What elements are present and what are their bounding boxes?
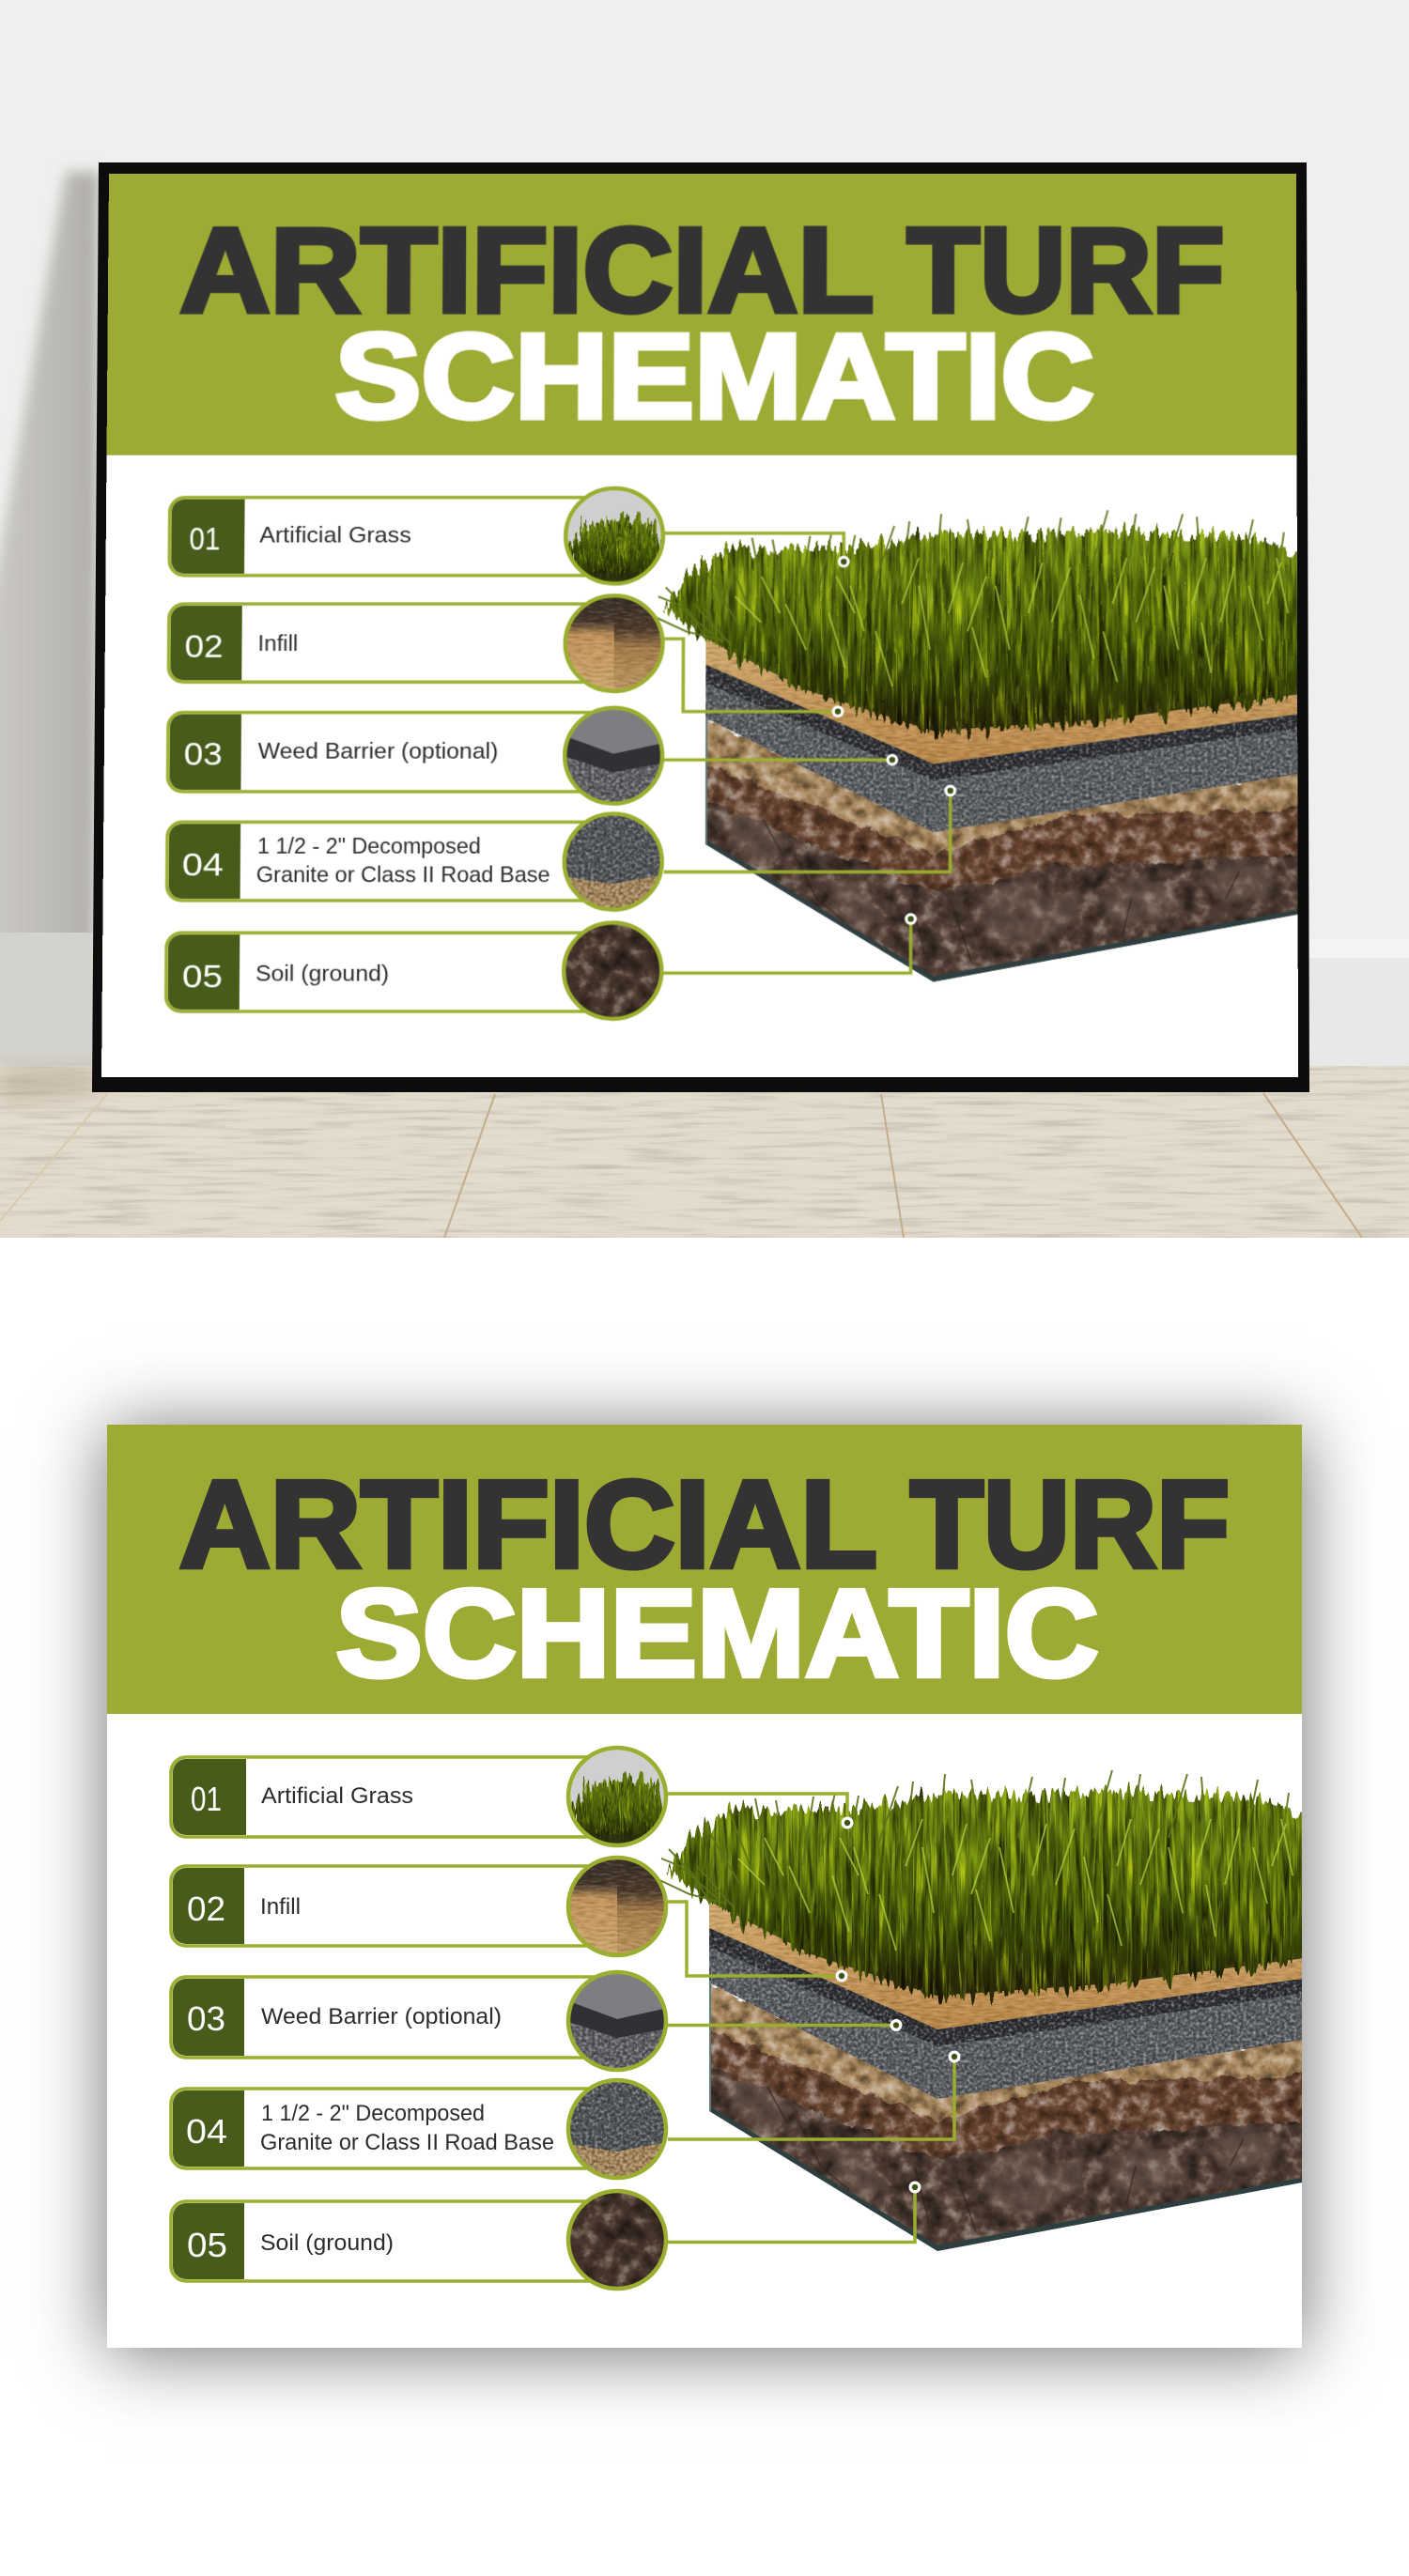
black poster frame bbox=[92, 162, 1309, 1092]
title: TURF bbox=[910, 1456, 1230, 1593]
row 05: soil bbox=[166, 921, 664, 1021]
row 05: soil: 05 bbox=[187, 2226, 227, 2264]
row 05: soil: 05 bbox=[180, 951, 222, 988]
title: SCHEMATIC bbox=[333, 310, 1093, 443]
row 01: artificial grass bbox=[169, 486, 665, 586]
title: TURF bbox=[906, 204, 1224, 338]
leader lines with dots bbox=[663, 533, 956, 973]
row 04: decomposed granite or road base: 1 1/2 - 2" Decomposed bbox=[261, 2101, 485, 2126]
mockup scene: wall, skirting and wooden floor bbox=[0, 0, 1409, 1238]
row 02: infill: Infill bbox=[256, 628, 297, 653]
row 05: soil bbox=[171, 2189, 668, 2291]
row 01: artificial grass: 01 bbox=[191, 1780, 222, 1818]
row 03: weed barrier bbox=[167, 706, 664, 806]
wall shadow left of the frame bbox=[0, 172, 99, 1064]
row 03: weed barrier: Weed Barrier (optional) bbox=[261, 2004, 502, 2029]
row 01: artificial grass: Artificial Grass bbox=[261, 1783, 413, 1809]
header band bbox=[107, 174, 1297, 455]
row 04: decomposed granite or road base bbox=[166, 812, 664, 912]
row 01: artificial grass: Artificial Grass bbox=[258, 521, 410, 546]
row 05: soil: Soil (ground) bbox=[254, 954, 386, 979]
poster: flat version with drop shadow bbox=[107, 1425, 1302, 2348]
row 01: artificial grass bbox=[171, 1746, 668, 1847]
row 02: infill: 02 bbox=[184, 625, 223, 662]
row 01: artificial grass: 01 bbox=[189, 519, 220, 555]
header band bbox=[107, 1425, 1302, 1714]
row 04: decomposed granite or road base: Granite or Class II Road Base bbox=[260, 2130, 554, 2155]
row 04: decomposed granite or road base: 1 1/2 - 2" Decomposed bbox=[255, 829, 478, 853]
row 04: decomposed granite or road base bbox=[171, 2078, 668, 2180]
turf cross-section illustration bbox=[654, 1770, 1319, 2260]
leader lines with dots bbox=[668, 1794, 960, 2243]
row 02: infill: Infill bbox=[260, 1894, 301, 1920]
title: ARTIFICIAL bbox=[179, 204, 875, 338]
row 05: soil: Soil (ground) bbox=[260, 2230, 394, 2256]
poster: framed mockup version bbox=[101, 174, 1298, 1077]
title bbox=[178, 204, 1225, 444]
row 03: weed barrier: 03 bbox=[183, 733, 222, 768]
wooden floor bbox=[0, 1066, 1409, 1238]
row 03: weed barrier bbox=[171, 1970, 668, 2072]
row 03: weed barrier: Weed Barrier (optional) bbox=[256, 735, 496, 759]
row 02: infill bbox=[168, 594, 665, 693]
row 03: weed barrier: 03 bbox=[187, 1999, 225, 2038]
row 04: decomposed granite or road base: 04 bbox=[186, 2112, 227, 2151]
title: ARTIFICIAL bbox=[179, 1456, 877, 1593]
row 04: decomposed granite or road base: 04 bbox=[181, 841, 223, 878]
row 02: infill bbox=[171, 1856, 668, 1957]
turf cross-section illustration bbox=[649, 510, 1315, 991]
title bbox=[179, 1456, 1230, 1702]
title: SCHEMATIC bbox=[336, 1565, 1099, 1702]
row 02: infill: 02 bbox=[187, 1890, 225, 1928]
row 04: decomposed granite or road base: Granite or Class II Road Base bbox=[255, 857, 547, 881]
